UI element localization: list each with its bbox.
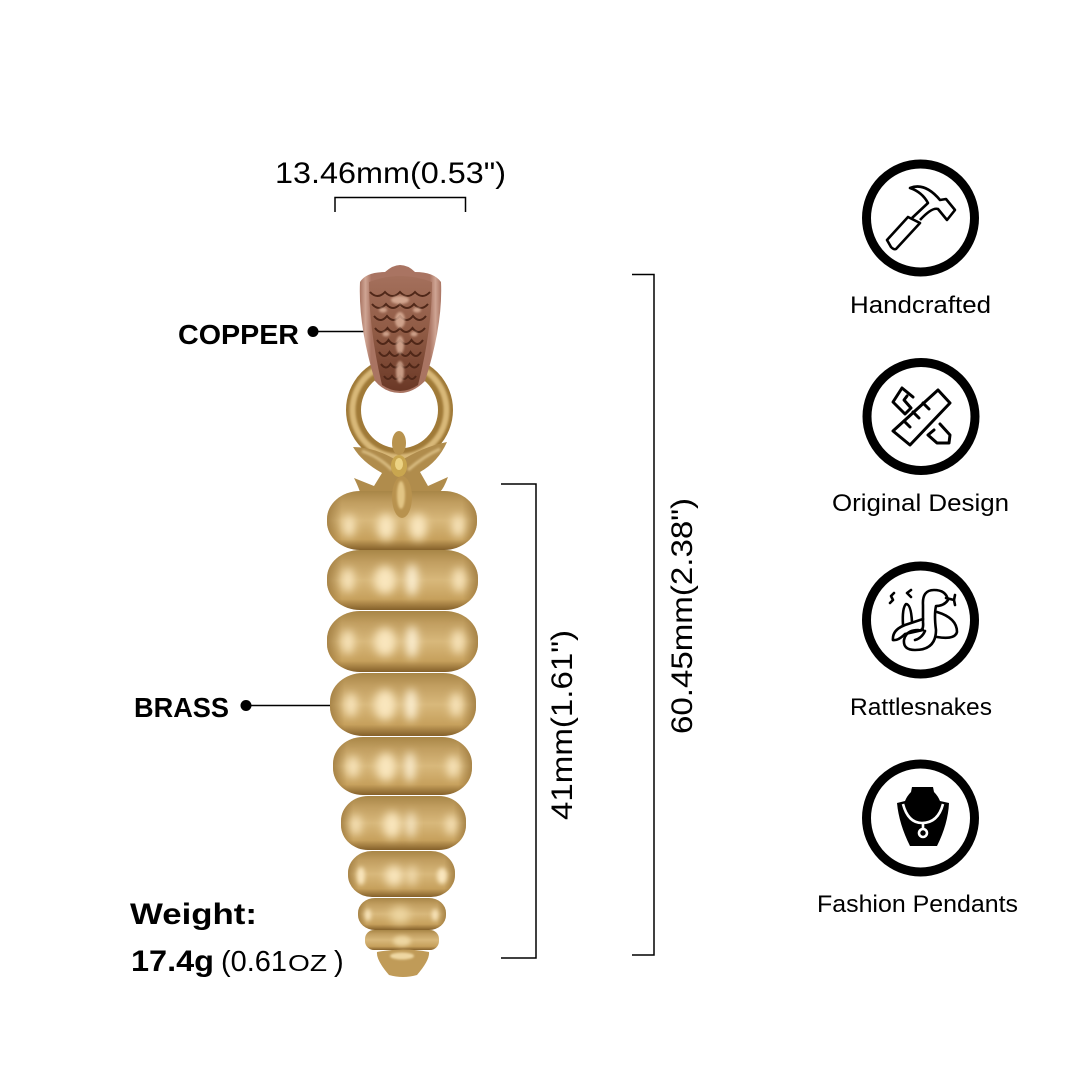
segment 6 xyxy=(341,796,466,850)
segment 8 xyxy=(358,898,446,930)
dimension: 60.45mm: 60.45mm(2.38") xyxy=(666,498,699,734)
segment 7 xyxy=(348,851,455,897)
feature: rattlesnakes xyxy=(850,566,992,721)
segment 2 xyxy=(327,550,478,610)
weight text: Weight: xyxy=(130,898,257,931)
icon: hammer xyxy=(866,164,974,272)
copper label: COPPER xyxy=(178,319,299,350)
segment 3 xyxy=(327,611,478,672)
icon: snake xyxy=(866,566,974,674)
label: Original Design xyxy=(832,490,1009,517)
segment 5 xyxy=(333,737,472,795)
dimension: 60.45mm xyxy=(632,274,699,955)
upper clasp bead xyxy=(392,476,412,518)
thorn ornament xyxy=(353,431,448,492)
width dimension xyxy=(275,157,506,212)
icon: ruler and pencil xyxy=(867,362,975,470)
width dimension: 13.46mm(0.53") xyxy=(275,157,506,190)
label: Handcrafted xyxy=(850,292,991,319)
pendant: rattlesnake rattle xyxy=(327,265,478,977)
segment 4 xyxy=(330,673,476,736)
label: Rattlesnakes xyxy=(850,694,992,721)
dimension: 41mm: 41mm(1.61") xyxy=(546,630,579,820)
feature: fashion pendants xyxy=(817,764,1018,918)
brass label xyxy=(134,692,344,723)
copper bail xyxy=(360,265,441,393)
brass ring xyxy=(352,363,446,457)
label: Fashion Pendants xyxy=(817,891,1018,918)
weight text: ) xyxy=(334,946,344,978)
feature: handcrafted xyxy=(850,164,991,319)
weight text: 17.4g xyxy=(131,945,214,978)
icon: necklace bust xyxy=(866,764,974,872)
copper label xyxy=(178,319,365,350)
segment 9 xyxy=(365,930,439,950)
weight text: OZ xyxy=(288,950,327,976)
feature: original design xyxy=(832,362,1009,517)
rattle tip xyxy=(377,950,429,977)
dimension: 41mm xyxy=(501,484,579,958)
weight text xyxy=(130,898,344,978)
brass label: BRASS xyxy=(134,692,229,723)
segment 1 xyxy=(327,491,477,550)
weight text: (0.61 xyxy=(221,946,287,978)
